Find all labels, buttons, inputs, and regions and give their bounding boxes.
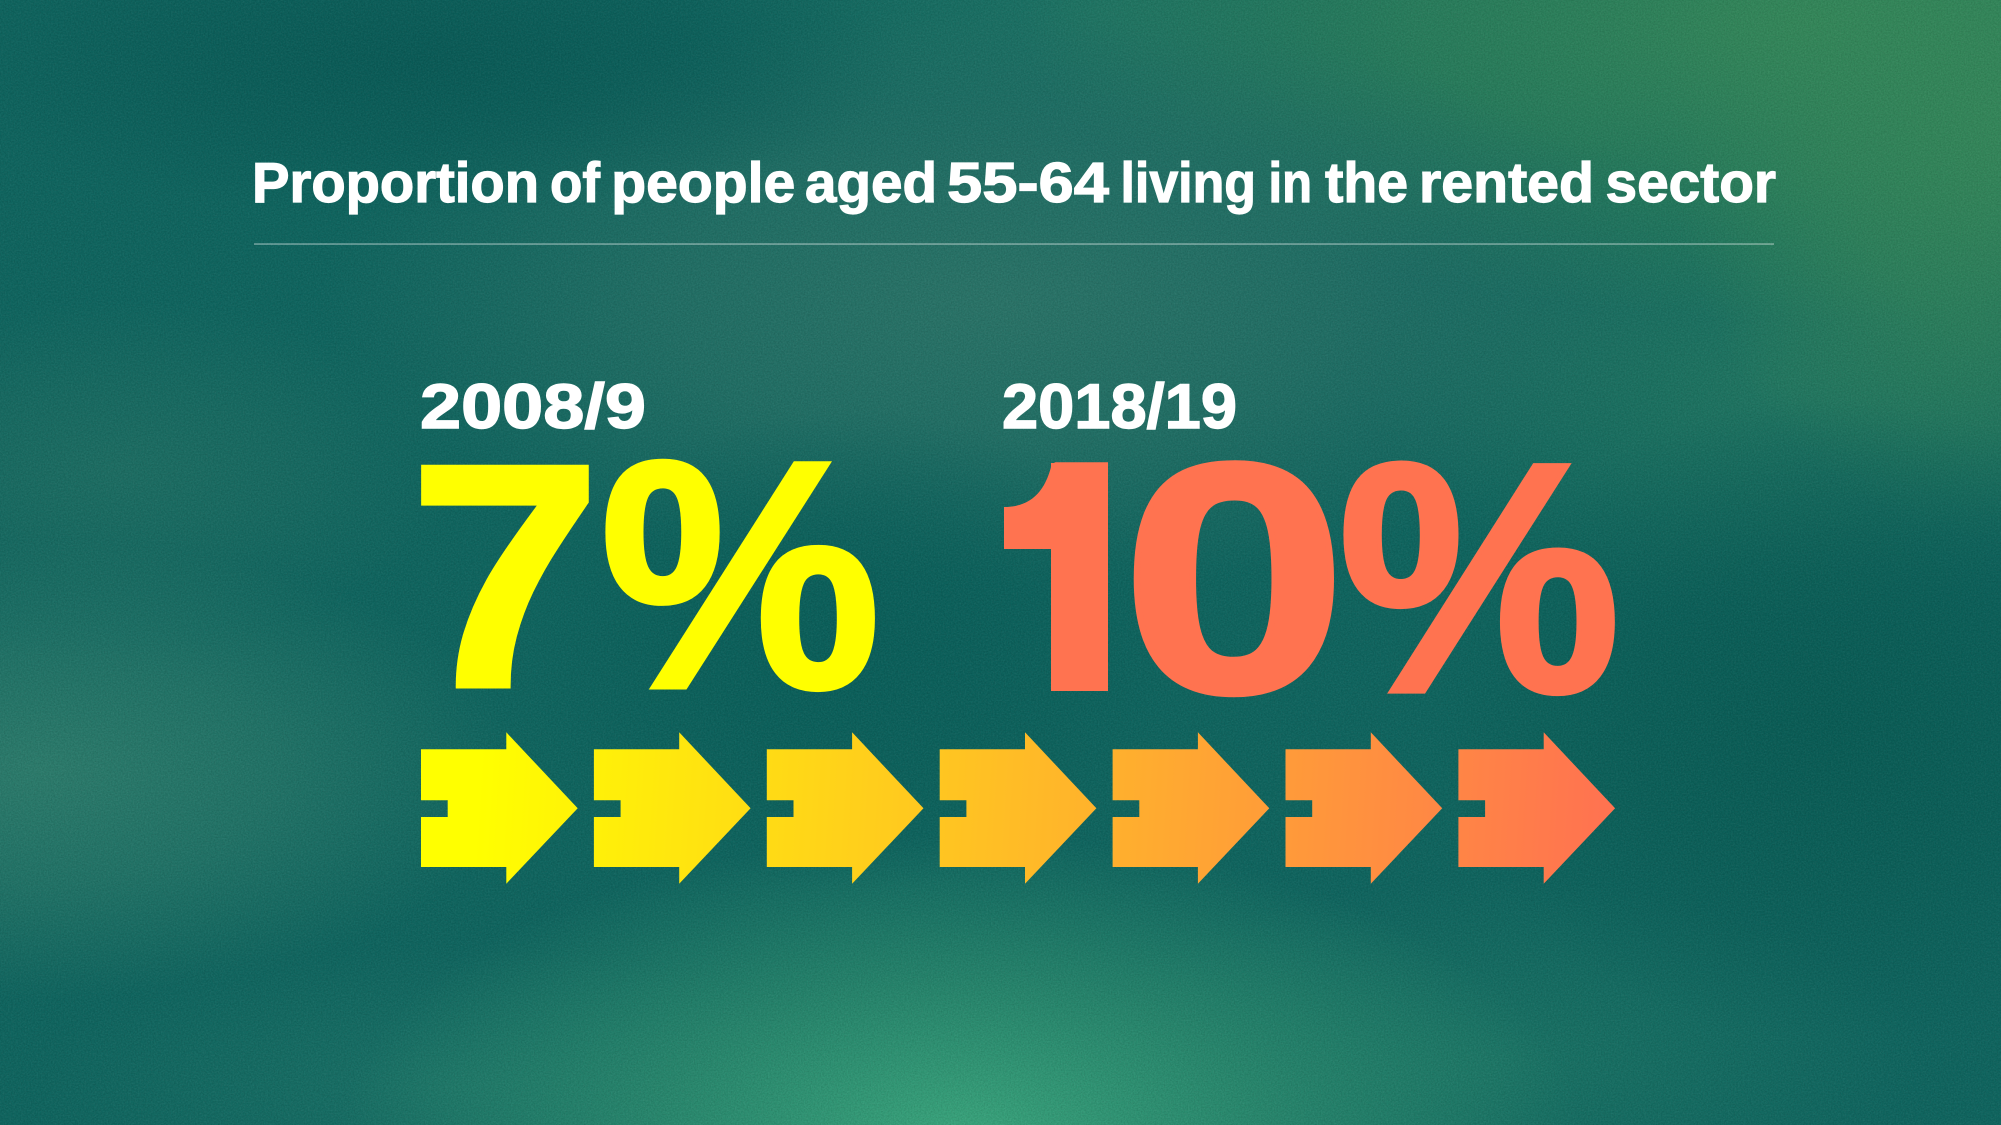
arrow 1	[421, 732, 578, 884]
big number: 10%: 1	[964, 394, 1176, 757]
title: in	[1268, 151, 1312, 215]
title: Proportion	[252, 151, 539, 215]
title: the	[1325, 151, 1408, 215]
arrow 4	[940, 732, 1096, 884]
title: people	[611, 151, 795, 215]
title: rented	[1419, 151, 1594, 215]
arrow 2	[594, 732, 751, 884]
title: living	[1120, 151, 1256, 215]
big number: 10%: 0	[1121, 396, 1348, 761]
big number: 7%: 7	[409, 399, 601, 754]
year label: 2018/19: 2018/19	[1002, 372, 1237, 442]
big number: 7%	[409, 393, 881, 756]
title rule	[254, 243, 1774, 245]
title: 55-64	[947, 151, 1109, 215]
arrow row	[421, 732, 1615, 884]
arrow 3	[767, 732, 924, 884]
big number: 7%: %	[600, 393, 881, 756]
arrow 5	[1113, 732, 1269, 884]
title: aged	[805, 151, 937, 215]
year label: 2008/9: 2008/9	[420, 372, 646, 442]
title: of	[550, 151, 601, 215]
arrow 7	[1458, 732, 1615, 884]
big number: 10%	[1004, 460, 1615, 698]
arrow 6	[1286, 732, 1442, 884]
title: sector	[1606, 151, 1776, 215]
big number: 10%: %	[1338, 396, 1621, 761]
